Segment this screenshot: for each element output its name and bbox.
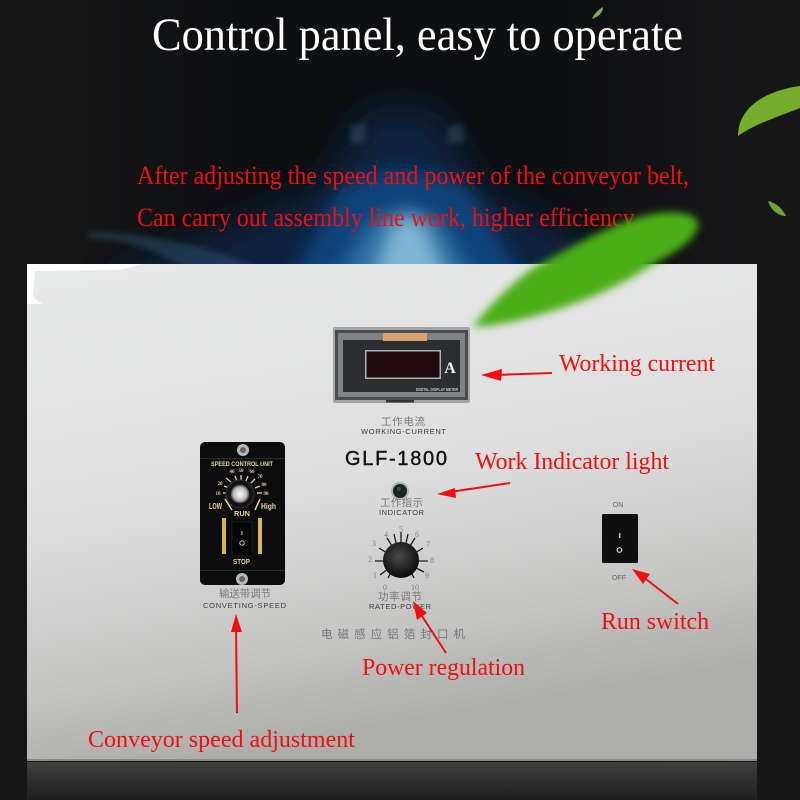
speed control unit: RUN [234,509,250,518]
power knob [368,525,434,611]
speed control unit: SPEED CONTROL UNIT [211,461,273,468]
panel reflection [27,762,757,800]
power knob: 4 [384,530,388,539]
run switch: ON [613,502,623,509]
conveyor speed label [203,586,287,610]
subtitle text: Can carry out assembly line work, higher efficiency, [137,203,639,232]
machine name: 电磁感应铝箔封口机 [321,626,466,642]
power knob: 6 [415,530,419,539]
label: run switch: Run switch [601,609,709,635]
power knob: 8 [430,556,434,565]
power knob: 3 [372,539,376,548]
arrow: run switch [632,569,678,604]
model name: GLF-1800 [345,448,447,470]
conveyor speed label: 输送带调节 [219,586,271,601]
meter: working current [333,327,470,403]
power knob: 0 [383,583,387,592]
arrow: working current [481,369,552,381]
working current label [361,414,446,436]
run switch: OFF [612,575,626,582]
working current label: 工作电流 [381,414,426,429]
speed control unit: 50 [238,469,244,474]
control panel [27,264,757,761]
run switch [602,502,638,582]
meter: working current: A [444,360,456,377]
speed control unit: 70 [258,475,263,480]
speed control unit: 60 [250,470,255,475]
arrow: conveyor [231,614,242,713]
speed control unit: 20 [218,482,223,487]
power knob: 7 [426,540,430,549]
meter: working current: DIGITAL DISPLAY METER [416,387,459,392]
speed control unit: 80 [262,483,267,488]
speed control unit: 10 [216,492,221,497]
background [86,94,592,264]
subtitle text [137,161,689,232]
leaf: small top [592,7,603,19]
large blurred leaf [473,213,698,327]
subtitle text: After adjusting the speed and power of the conveyor belt, [137,161,689,190]
power knob: 2 [368,555,372,564]
power knob: 10 [411,583,419,592]
power knob: 5 [399,525,403,534]
speed control unit: LOW [209,502,222,511]
speed control unit: STOP [233,559,250,566]
speed control unit: 40 [230,470,235,475]
leaf: small right [768,201,786,216]
power knob: RATED-POWER [369,602,432,611]
working current label: WORKING-CURRENT [361,427,446,436]
title: Control panel, easy to operate [152,9,683,61]
indicator light [379,482,425,517]
leaf: top right [738,86,800,136]
indicator light: 工作指示 [380,495,423,510]
indicator light: INDICATOR [379,508,425,517]
conveyor speed label: CONVETING-SPEED [203,601,287,610]
arrow: indicator [437,483,510,498]
speed control unit [200,442,285,585]
power knob: 9 [425,571,429,580]
speed control unit: 90 [264,492,269,497]
arrow: power [413,601,446,653]
power knob: 1 [373,571,377,580]
label: indicator: Work Indicator light [475,449,669,475]
label: working current: Working current [559,351,715,377]
power knob: 功率调节 [378,589,422,604]
speed control unit: High [261,502,276,511]
label: conveyor: Conveyor speed adjustment [88,727,355,753]
label: power: Power regulation [362,655,525,681]
